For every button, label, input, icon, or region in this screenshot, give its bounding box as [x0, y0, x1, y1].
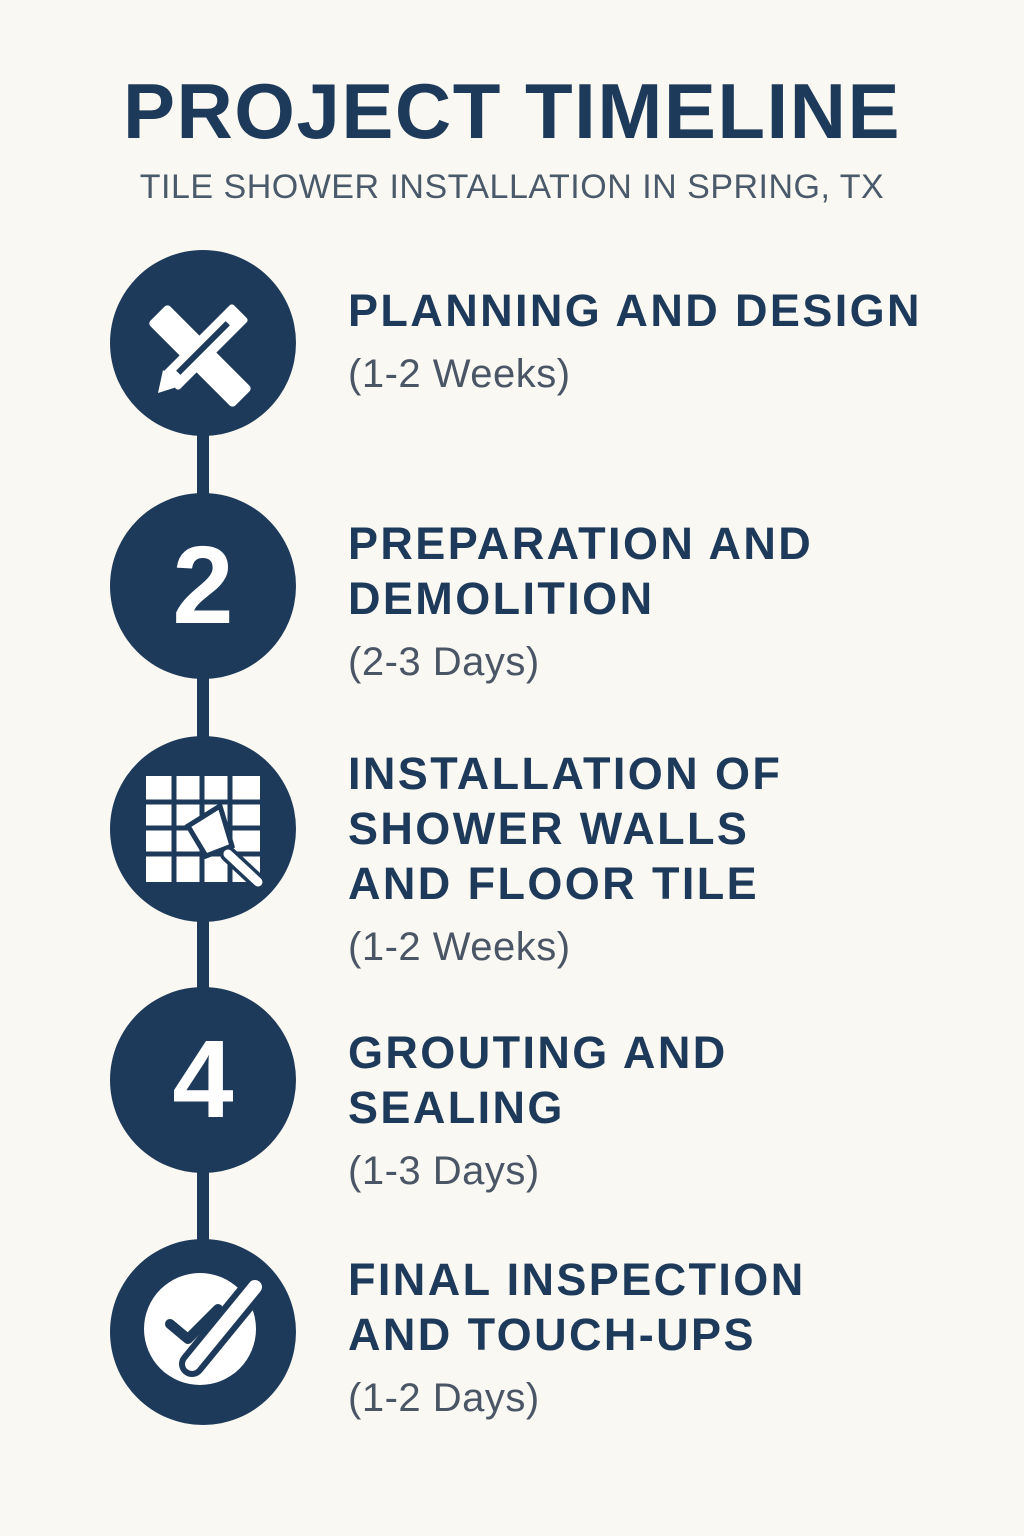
- icon: number 2: 2: [172, 524, 234, 647]
- step 1 text: (1-2 Weeks): [348, 352, 571, 396]
- icon: number 2: [110, 493, 296, 679]
- step 4 text: (1-3 Days): [348, 1149, 540, 1193]
- title: PROJECT TIMELINE: [123, 67, 901, 155]
- step 5 text: AND TOUCH-UPS: [348, 1309, 756, 1360]
- step 3 text: (1-2 Weeks): [348, 925, 571, 969]
- icon: number 4: [110, 987, 296, 1173]
- step 5 text: (1-2 Days): [348, 1376, 540, 1420]
- step 4 text: SEALING: [348, 1082, 565, 1133]
- step 2 text: (2-3 Days): [348, 640, 540, 684]
- step 3 text: INSTALLATION OF: [348, 748, 782, 799]
- step 3 text: [348, 748, 782, 969]
- timeline connector line: [197, 340, 209, 1330]
- step 2 text: [348, 518, 813, 684]
- step 4 text: [348, 1027, 728, 1193]
- step 5 text: FINAL INSPECTION: [348, 1254, 806, 1305]
- step 2 text: DEMOLITION: [348, 573, 654, 624]
- step 3 text: AND FLOOR TILE: [348, 858, 759, 909]
- icon: ruler and pencil: [110, 250, 296, 436]
- subtitle: TILE SHOWER INSTALLATION IN SPRING, TX: [140, 168, 884, 206]
- step 3 text: SHOWER WALLS: [348, 803, 749, 854]
- icon: check with caulk gun: [110, 1239, 296, 1425]
- step 4 text: GROUTING AND: [348, 1027, 728, 1078]
- step 2 text: PREPARATION AND: [348, 518, 813, 569]
- icon: tile grid with trowel: [110, 736, 296, 922]
- icon: number 4: 4: [172, 1018, 234, 1141]
- step 1 text: [348, 285, 922, 396]
- step 1 text: PLANNING AND DESIGN: [348, 285, 922, 336]
- step 5 text: [348, 1254, 806, 1420]
